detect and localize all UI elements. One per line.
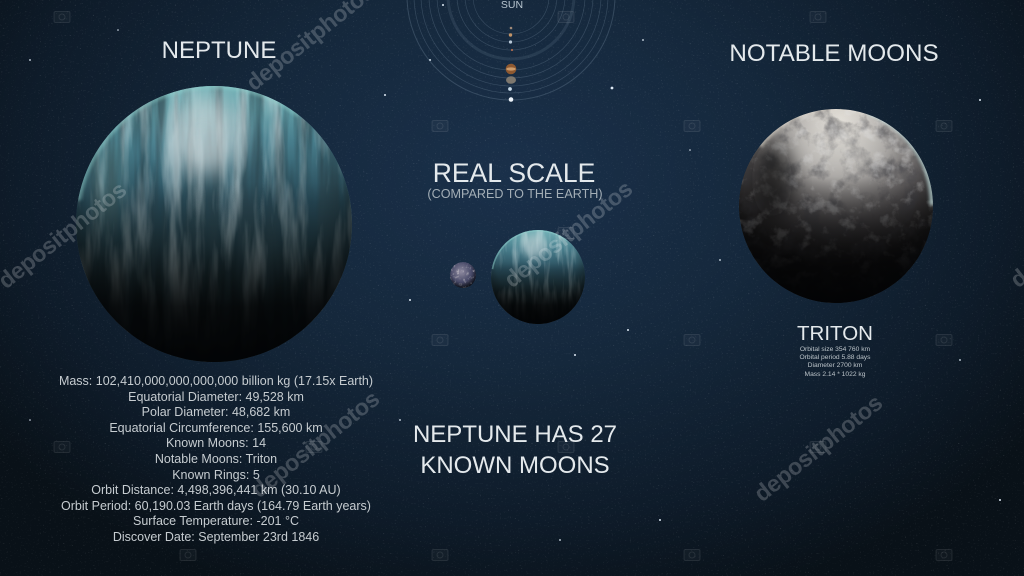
moons count text: NEPTUNE HAS 27 <box>413 421 617 448</box>
Neptune facts list: Known Rings: 5 <box>172 468 260 482</box>
Triton facts: Orbital size 354 760 km <box>800 346 870 353</box>
Neptune facts list: Orbit Period: 60,190.03 Earth days (164.79 Earth years) <box>61 499 371 513</box>
watermarks: depositphotos <box>499 175 637 293</box>
Triton facts <box>799 346 870 378</box>
Neptune facts list: Equatorial Circumference: 155,600 km <box>109 421 323 435</box>
moons count text <box>413 421 617 478</box>
Neptune facts list: Surface Temperature: -201 °C <box>133 514 299 528</box>
Neptune facts list: Mass: 102,410,000,000,000,000 billion kg (17.15x Earth) <box>59 374 373 388</box>
icon: Neptune planet <box>76 86 352 362</box>
planet artwork <box>76 86 933 362</box>
label: Triton: TRITON <box>797 322 873 345</box>
moons count text: KNOWN MOONS <box>420 452 610 478</box>
Neptune facts list: Discover Date: September 23rd 1846 <box>113 530 319 544</box>
title: Notable moons: NOTABLE MOONS <box>729 40 939 67</box>
watermarks: depositphotos <box>749 389 887 507</box>
planets on orbit axis <box>506 27 516 102</box>
Triton facts: Mass 2.14 * 1022 kg <box>805 371 865 378</box>
Neptune facts list: Orbit Distance: 4,498,396,441 km (30.10 AU) <box>91 483 341 497</box>
icon: Neptune real scale <box>491 230 585 324</box>
Neptune facts list: Polar Diameter: 48,682 km <box>142 405 290 419</box>
subheading: compared to the Earth: (COMPARED TO THE EARTH) <box>427 187 603 201</box>
Triton facts: Orbital period 5.88 days <box>799 354 870 361</box>
Neptune facts list <box>59 374 373 544</box>
Neptune facts list: Notable Moons: Triton <box>155 452 277 466</box>
title: Neptune: NEPTUNE <box>162 37 276 64</box>
heading: Real scale: REAL SCALE <box>433 158 595 188</box>
Neptune facts list: Equatorial Diameter: 49,528 km <box>128 390 304 404</box>
icon: Earth small <box>450 262 476 288</box>
Neptune facts list: Known Moons: 14 <box>166 436 266 450</box>
icon: Triton moon <box>739 107 933 303</box>
Triton facts: Diameter 2700 km <box>808 362 862 369</box>
watermarks: depositphotos <box>246 385 384 503</box>
